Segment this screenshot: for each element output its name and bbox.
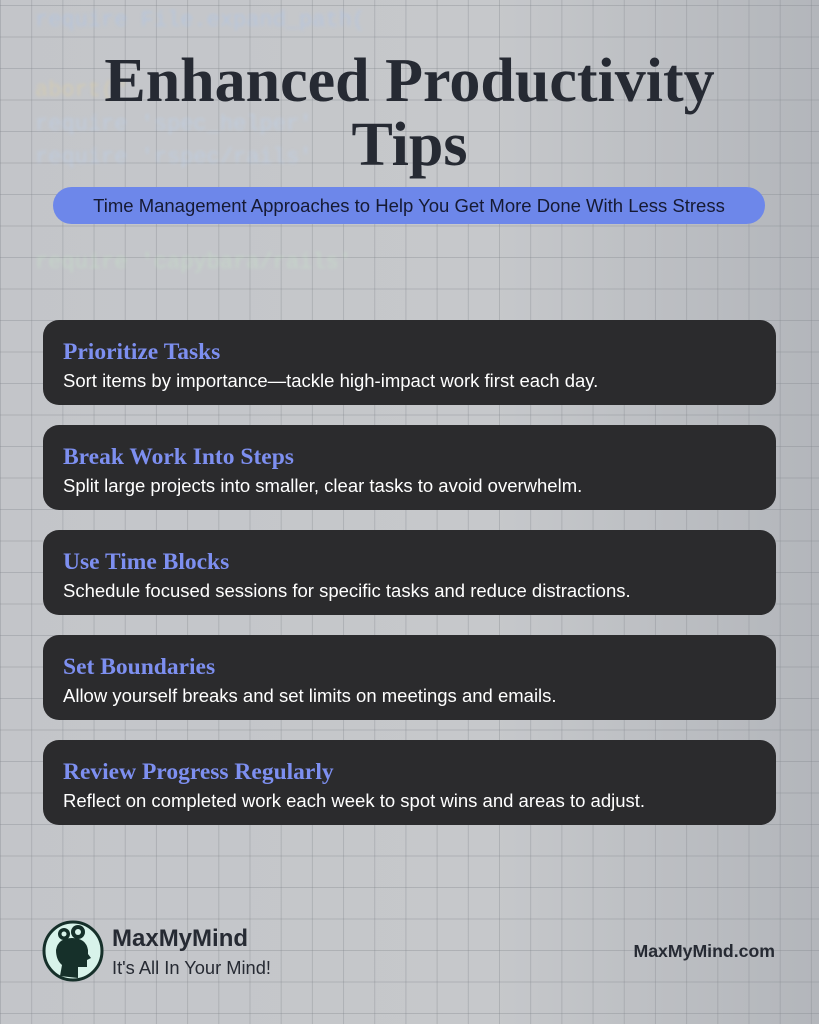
card: use time blocks: Schedule focused sessions for specific tasks and reduce distractions. [63, 580, 631, 601]
title: Tips [351, 111, 468, 179]
card: set boundaries: Set Boundaries [63, 654, 215, 680]
card: break work into steps: Break Work Into Steps [63, 444, 294, 470]
card: prioritize tasks [43, 320, 776, 405]
card: set boundaries [43, 635, 776, 720]
text: abort(" [35, 78, 127, 103]
subtitle pill: Time Management Approaches to Help You Get More Done With Less Stress [93, 195, 725, 216]
subtitle pill [53, 187, 765, 224]
text: require 'spec_helper' [35, 112, 312, 137]
card: prioritize tasks: Sort items by importance—tackle high-impact work first each day. [63, 370, 598, 391]
card: set boundaries: Allow yourself breaks and set limits on meetings and emails. [63, 685, 557, 706]
website: MaxMyMind.com [633, 941, 775, 961]
card: use time blocks: Use Time Blocks [63, 549, 229, 575]
card: prioritize tasks: Prioritize Tasks [63, 339, 220, 365]
brand name: MaxMyMind [112, 925, 248, 952]
card: break work into steps: Split large projects into smaller, clear tasks to avoid overwhelm. [63, 475, 582, 496]
text: require 'capybara/rails' [35, 250, 352, 275]
icon: logo [42, 920, 104, 982]
title [104, 47, 715, 179]
card: break work into steps [43, 425, 776, 510]
card: review progress: Reflect on completed work each week to spot wins and areas to adjust. [63, 790, 645, 811]
text: require 'rspec/rails' [35, 145, 312, 170]
tagline: It's All In Your Mind! [112, 957, 271, 978]
card: review progress [43, 740, 776, 825]
title: Enhanced Productivity [104, 47, 715, 115]
card: review progress: Review Progress Regularly [63, 759, 334, 785]
text: require File.expand_path( [35, 8, 365, 33]
card: use time blocks [43, 530, 776, 615]
